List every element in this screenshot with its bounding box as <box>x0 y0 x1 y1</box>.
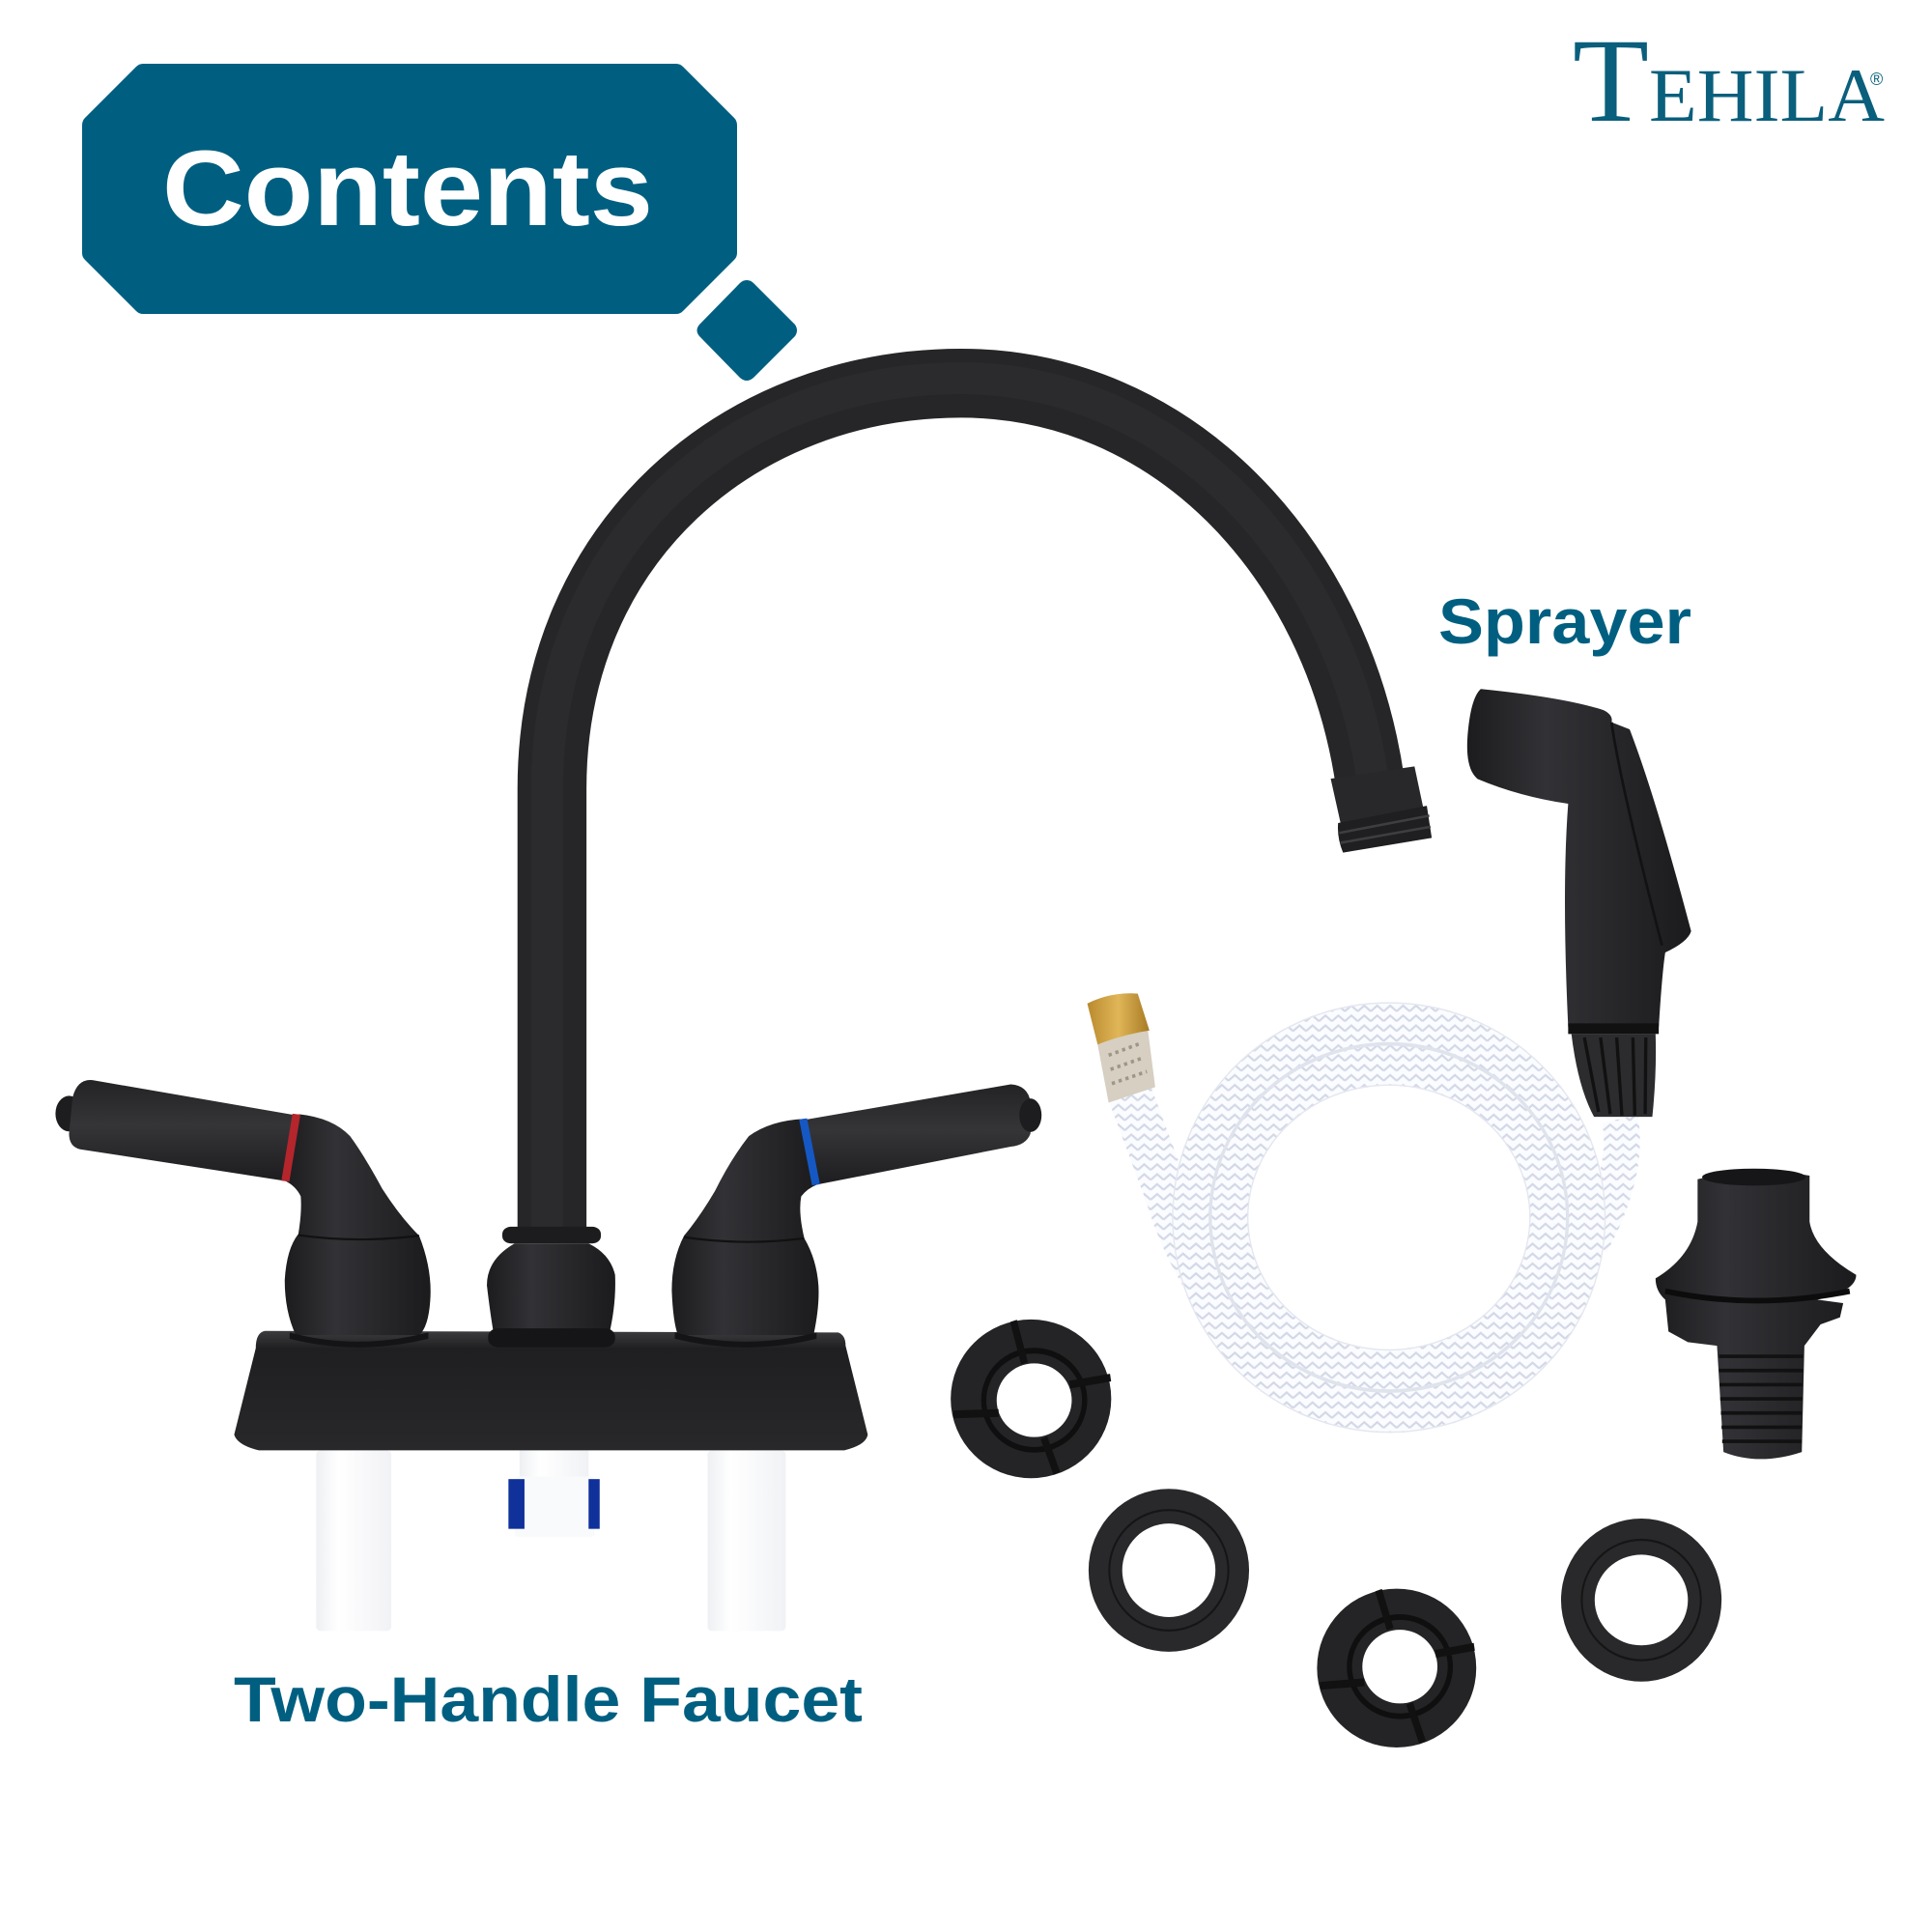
washer, lower right <box>1561 1519 1721 1682</box>
center connector with blue bands <box>508 1450 600 1537</box>
banner diamond accent <box>697 280 797 381</box>
heading banner: Contents <box>82 64 737 314</box>
faucet lower assembly <box>55 1080 1041 1631</box>
white supply pipes <box>316 1450 785 1631</box>
slotted nut, upper left <box>951 1320 1111 1478</box>
accessories <box>951 689 1857 1747</box>
washer, lower left <box>1089 1489 1249 1652</box>
left handle <box>55 1080 431 1348</box>
label: Sprayer: Sprayer <box>1438 585 1691 657</box>
slotted nut, bottom <box>1317 1589 1476 1747</box>
deck plate <box>234 1331 867 1450</box>
sprayer mount <box>1656 1169 1857 1459</box>
heading banner: Contents: Contents <box>162 129 653 248</box>
label: Two-Handle Faucet: Two-Handle Faucet <box>234 1663 863 1735</box>
logo: Tehila: ® <box>1870 70 1883 89</box>
sprayer hose <box>1088 993 1622 1433</box>
sprayer head <box>1467 689 1691 1117</box>
faucet spout <box>547 379 1432 1233</box>
right handle <box>671 1084 1041 1348</box>
logo: Tehila: TEHILA <box>1573 14 1885 147</box>
center hub <box>487 1227 615 1348</box>
